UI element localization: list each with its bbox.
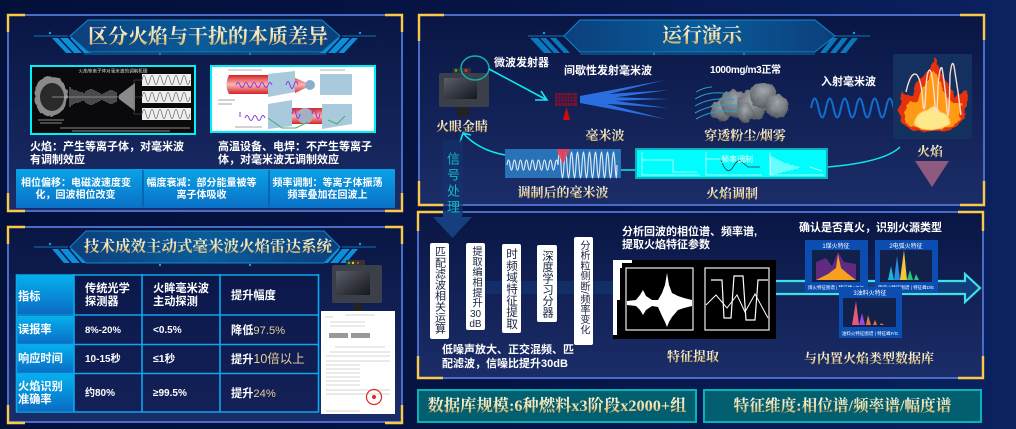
label: fire eye: 火眼金睛 (436, 119, 488, 134)
row: response time: 响应时间 (18, 351, 63, 365)
process step: matched filtering: 匹配滤波相关运算 (434, 246, 446, 335)
database card 1: coal fire: 煤火特征图谱 | 特征峰A/B/C (808, 284, 865, 291)
flame modulation charts: 频率调制 (721, 154, 753, 164)
modulated millimeter wave (505, 149, 621, 178)
arrow: modulated wave back to device (460, 133, 505, 155)
panel: technical results (8, 227, 402, 423)
chart: echo waveform and spectrum (613, 260, 776, 339)
panel: signal processing flow (418, 212, 983, 378)
database card 3: oil fire: 3油料火特征 (853, 289, 887, 297)
emitter grid and pointer (555, 93, 577, 120)
image: flame with wave (893, 54, 972, 139)
image: high temperature equipment diagram (211, 66, 375, 132)
process step: time-frequency features (502, 244, 521, 333)
process step: analysis (574, 237, 593, 345)
highlight ellipse on emitter (461, 56, 489, 80)
icon: radar device (332, 260, 382, 311)
image: flame plasma modulation mechanism: 火焰等离子体对毫米波的调制机理 (79, 68, 148, 74)
flame modulation charts (636, 149, 827, 178)
database card 1: coal fire (805, 240, 868, 292)
panel: operation demo (419, 15, 984, 205)
table header row: 主动探测 (153, 294, 198, 308)
image: flame plasma modulation mechanism (31, 66, 195, 134)
row: recognition accuracy (18, 379, 276, 406)
table header row: 探测器 (85, 294, 119, 308)
panel: essential difference between flame and interference (8, 15, 402, 211)
table header row: 提升幅度 (231, 288, 276, 302)
arrow: emitter to millimeter wave (489, 69, 547, 100)
heading banner: operation demo: 运行演示 (662, 24, 744, 47)
text: low noise amplification: 低噪声放大、正交混频、匹 (442, 342, 574, 356)
text: analyze echo spectra: 分析回波的相位谱、频率谱, (622, 224, 757, 238)
table header row: 火眸毫米波 (153, 281, 209, 295)
row: false alarm rate: <0.5% (153, 325, 182, 336)
text: low noise amplification: 配滤波，信噪比提升30dB (442, 356, 568, 370)
database card 3: oil fire (839, 287, 902, 338)
table header row: 传统光学 (85, 281, 130, 295)
effect: frequency modulation: 频率叠加在回波上 (288, 188, 368, 201)
heading banner: technical results: 技术成效主动式毫米波火焰雷达系统 (84, 236, 333, 256)
image: test certificate document (321, 311, 395, 414)
effect: amplitude attenuation: 离子体吸收 (176, 188, 226, 201)
label: incident millimeter wave: 入射毫米波 (821, 74, 876, 88)
row: false alarm rate: 8%-20% (85, 325, 121, 336)
text: analyze echo spectra: 提取火焰特征参数 (622, 237, 710, 251)
effect: phase shift: 化，回波相位改变 (36, 188, 116, 201)
label: microwave emitter: 微波发射器 (494, 55, 549, 69)
effect: amplitude attenuation: 幅度衰减：部分能量被等 (146, 176, 256, 189)
process step: phase coding gain: 30 (470, 309, 481, 320)
process step: deep learning classifier: 深度学习分器 (541, 249, 554, 318)
stat box: feature dimensions (704, 390, 981, 422)
heading banner: technical results (34, 231, 376, 266)
text: high temperature equipment description: 体，对毫米波无调制效应 (218, 152, 339, 166)
process step: matched filtering (430, 243, 449, 339)
row: response time: 10-15秒 (85, 352, 121, 365)
stat box: feature dimensions: 特征维度:相位谱/频率谱/幅度谱 (734, 396, 952, 415)
text: flame description: 有调制效应 (30, 152, 85, 166)
label: penetrates dust and smoke: 穿透粉尘/烟雾 (704, 128, 786, 143)
label: signal processing: 信号处理 (445, 152, 460, 216)
row: false alarm rate (18, 322, 285, 337)
database card 2: electric arc fire (875, 240, 938, 292)
text: confirm real fire: 确认是否真火，识别火源类型 (799, 220, 942, 234)
label: feature extraction: 特征提取 (667, 349, 719, 364)
label: millimeter wave: 毫米波 (585, 128, 625, 143)
process step: phase coding gain: dB (469, 319, 482, 330)
row: recognition accuracy: ≥99.5% (153, 388, 187, 399)
large flow arrow (470, 274, 980, 302)
effect: phase shift: 相位偏移：电磁波速度变 (21, 176, 131, 189)
row: recognition accuracy: 火焰识别 (18, 379, 63, 393)
label: modulated millimeter wave: 调制后的毫米波 (517, 185, 609, 200)
comparison table (16, 274, 319, 412)
blue info strip with three effects (16, 169, 395, 208)
process step: phase coding gain (466, 243, 485, 330)
millimeter wave beams (580, 80, 669, 119)
database card 3: oil fire: 油料火特征图谱 | 特征峰F/G (842, 330, 899, 337)
database card 2: electric arc fire: 2电弧火特征 (889, 242, 923, 250)
database card 1: coal fire: 1煤火特征 (822, 242, 850, 250)
row: response time: 提升10倍以上 (231, 351, 305, 366)
table header row (18, 281, 276, 308)
text: flame description: 火焰：产生等离子体，对毫米波 (30, 139, 184, 153)
label: concentration: 1000mg/m3正常 (710, 63, 781, 76)
smoke cloud with wave arcs (695, 82, 789, 122)
label: flame modulation: 火焰调制 (706, 186, 758, 201)
incident wave (811, 98, 894, 118)
row: recognition accuracy: 提升24% (231, 386, 276, 400)
label: intermittent millimeter wave: 间歇性发射毫米波 (564, 63, 652, 77)
effect: frequency modulation: 频率调制：等离子体振荡 (272, 176, 382, 189)
heading banner: essential difference (34, 20, 376, 55)
process step: phase coding gain: 提取编相提升 (470, 246, 482, 309)
text: high temperature equipment description: 高温设备、电焊：不产生等离子 (218, 139, 372, 153)
label: built-in flame type database: 与内置火焰类型数据库 (804, 351, 934, 366)
connector line between panels (621, 169, 635, 171)
row: false alarm rate: 降低97.5% (231, 323, 285, 337)
process step: deep learning classifier (537, 245, 557, 322)
table header row: 指标 (18, 289, 40, 303)
heading banner: operation demo (528, 20, 870, 55)
row: recognition accuracy: 约80% (85, 386, 115, 399)
label: flame: 火焰 (917, 144, 943, 159)
heading banner: essential difference: 区分火焰与干扰的本质差异 (88, 24, 328, 48)
row: response time: ≤1秒 (153, 352, 176, 365)
database card 2: electric arc fire: 电弧火特征图谱 | 特征峰D/E (878, 284, 934, 291)
row: recognition accuracy: 准确率 (18, 392, 52, 406)
arrow: flame to modulation (828, 147, 900, 167)
process step: time-frequency features: 时频域特征提取 (505, 248, 518, 330)
process step: analysis: 分析粒侧断/频率变化 (578, 240, 590, 335)
signal processing arrow (433, 140, 472, 238)
stat box: database scale: 数据库规模:6种燃料x3阶段x2000+组 (428, 396, 687, 415)
row: false alarm rate: 误报率 (18, 322, 52, 336)
icon: radar device fire eye (439, 68, 489, 117)
row: response time (18, 351, 305, 366)
stat box: database scale (418, 390, 696, 422)
triangle pointer below flame (915, 161, 949, 187)
